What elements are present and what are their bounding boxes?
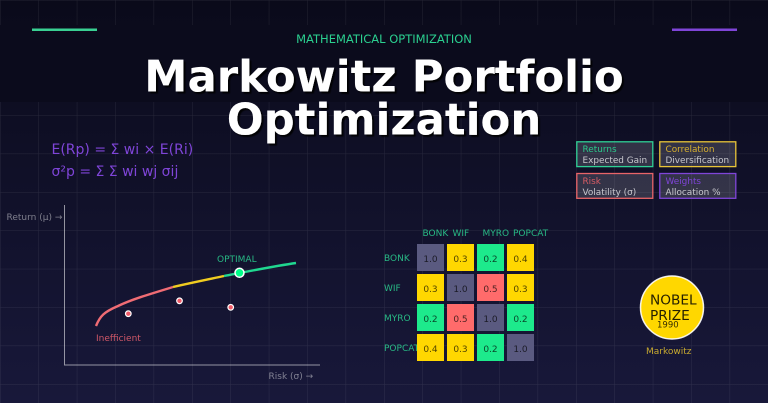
legend: risk — [577, 174, 653, 198]
matrix values: 0.2 — [483, 345, 498, 355]
eyebrow label: MATHEMATICAL OPTIMIZATION — [296, 32, 472, 46]
matrix cells — [417, 244, 534, 361]
accent line: green — [32, 28, 97, 31]
axes — [64, 205, 320, 365]
matrix values: 0.4 — [423, 345, 438, 355]
correlation matrix — [384, 229, 549, 361]
legend: weights — [660, 174, 736, 198]
matrix values: 1.0 — [453, 285, 468, 295]
column labels: BONK — [422, 229, 449, 239]
row labels: POPCAT — [384, 344, 420, 354]
x axis label: Risk (σ) → — [268, 372, 314, 382]
row labels: WIF — [384, 284, 401, 294]
title: Markowitz Portfolio — [144, 52, 624, 102]
matrix values: 1.0 — [513, 345, 528, 355]
matrix values — [423, 255, 528, 355]
matrix values: 0.5 — [483, 285, 498, 295]
column labels: WIF — [452, 229, 469, 239]
legend: returns: Returns — [582, 145, 617, 155]
frontier curve: green — [224, 263, 296, 276]
formulas: E(Rp) = Σ wi × E(Ri) — [52, 142, 193, 158]
legend: correlation — [660, 142, 736, 167]
matrix values: 0.5 — [453, 315, 468, 325]
nobel prize badge: NOBEL — [650, 292, 697, 308]
title: Optimization — [227, 96, 541, 146]
optimal label: OPTIMAL — [217, 255, 257, 265]
inefficient label: Inefficient — [96, 334, 141, 344]
row labels: BONK — [384, 254, 411, 264]
legend: risk: Volatility (σ) — [582, 188, 636, 198]
matrix values: 0.2 — [483, 255, 498, 265]
header band — [0, 25, 768, 102]
row labels — [384, 254, 420, 354]
nobel prize badge: PRIZE — [650, 308, 690, 324]
y axis label: Return (μ) → — [6, 213, 63, 223]
frontier curve: red — [96, 287, 173, 326]
nobel prize badge — [640, 276, 704, 357]
accent line: purple — [672, 28, 737, 31]
legend: risk: Risk — [582, 177, 602, 187]
inefficient points — [126, 298, 234, 317]
matrix values: 1.0 — [423, 255, 438, 265]
badge caption: Markowitz — [646, 347, 692, 357]
column labels: MYRO — [482, 229, 509, 239]
column labels: POPCAT — [513, 229, 549, 239]
formulas — [52, 142, 193, 180]
matrix values: 0.3 — [423, 285, 438, 295]
matrix values: 0.3 — [453, 345, 468, 355]
legend: weights: Allocation % — [666, 188, 721, 198]
title — [144, 52, 624, 146]
matrix values: 1.0 — [483, 315, 498, 325]
matrix values: 0.2 — [513, 315, 528, 325]
matrix values: 0.4 — [513, 255, 528, 265]
column labels — [422, 229, 549, 239]
frontier curve: yellow — [173, 276, 224, 287]
legend: returns — [577, 142, 653, 167]
legend grid — [577, 142, 736, 198]
optimal point — [235, 268, 244, 277]
legend: weights: Weights — [666, 177, 701, 187]
formulas: σ²p = Σ Σ wi wj σij — [52, 164, 178, 180]
legend: correlation: Diversification — [666, 156, 729, 166]
legend: returns: Expected Gain — [582, 156, 647, 166]
row labels: MYRO — [384, 314, 411, 324]
efficient frontier chart — [6, 205, 320, 382]
matrix values: 0.3 — [453, 255, 468, 265]
nobel prize badge: 1990 — [657, 320, 679, 330]
matrix values: 0.3 — [513, 285, 528, 295]
matrix values: 0.2 — [423, 315, 438, 325]
legend: correlation: Correlation — [666, 145, 714, 155]
